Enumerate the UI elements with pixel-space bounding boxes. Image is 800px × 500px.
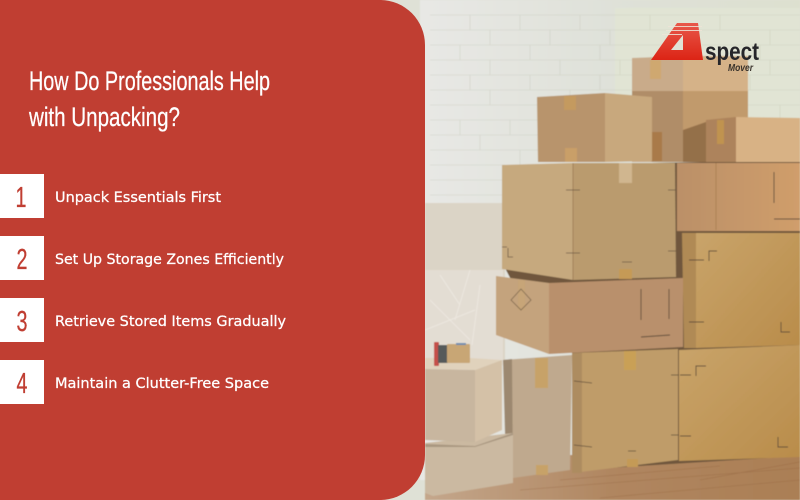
icon: tape dispenser [434, 342, 470, 366]
number badge 3 [0, 298, 44, 342]
box: large centre [502, 163, 676, 280]
box: small top [537, 93, 652, 162]
plastic-covered sofa [425, 203, 505, 365]
number badge 1: 1 [16, 182, 26, 214]
panel: red content panel [0, 0, 425, 500]
item 2 label: Set Up Storage Zones Efficiently [55, 252, 284, 268]
box: bottom centre [572, 349, 680, 473]
item 2 [0, 236, 284, 280]
box: back tall [632, 56, 748, 162]
item 4 label: Maintain a Clutter-Free Space [55, 376, 269, 392]
item 1 label: Unpack Essentials First [55, 190, 222, 206]
item 4 [0, 360, 269, 404]
box: middle row [496, 276, 683, 354]
box: pale stacked upper [425, 358, 502, 442]
item 3 [0, 298, 286, 342]
logo tagline: Mover [728, 62, 754, 74]
number badge 2: 2 [17, 244, 27, 276]
box: right lower [682, 233, 800, 348]
item 1 [0, 174, 222, 218]
box: tall pale [503, 355, 572, 478]
item 3 label: Retrieve Stored Items Gradually [55, 314, 286, 330]
logo mark: striped A [651, 23, 703, 60]
number badge 1 [0, 174, 44, 218]
box: right middle [677, 163, 800, 231]
box: right top [706, 117, 800, 162]
photo: stacked moving boxes [420, 0, 800, 500]
box stack shadow backing [506, 160, 800, 470]
wall [420, 0, 800, 480]
box: bottom right [679, 345, 800, 461]
logo wordmark: spect [705, 38, 760, 66]
number badge 4 [0, 360, 44, 404]
number badge 4: 4 [17, 368, 28, 400]
title: How Do Professionals Help [29, 66, 270, 96]
title: with Unpacking? [28, 102, 180, 132]
number badge 2 [0, 236, 44, 280]
wooden floor [425, 455, 800, 500]
logo: Aspect Mover [651, 23, 760, 74]
number badge 3: 3 [17, 306, 27, 338]
box: pale stacked lower [425, 433, 513, 496]
